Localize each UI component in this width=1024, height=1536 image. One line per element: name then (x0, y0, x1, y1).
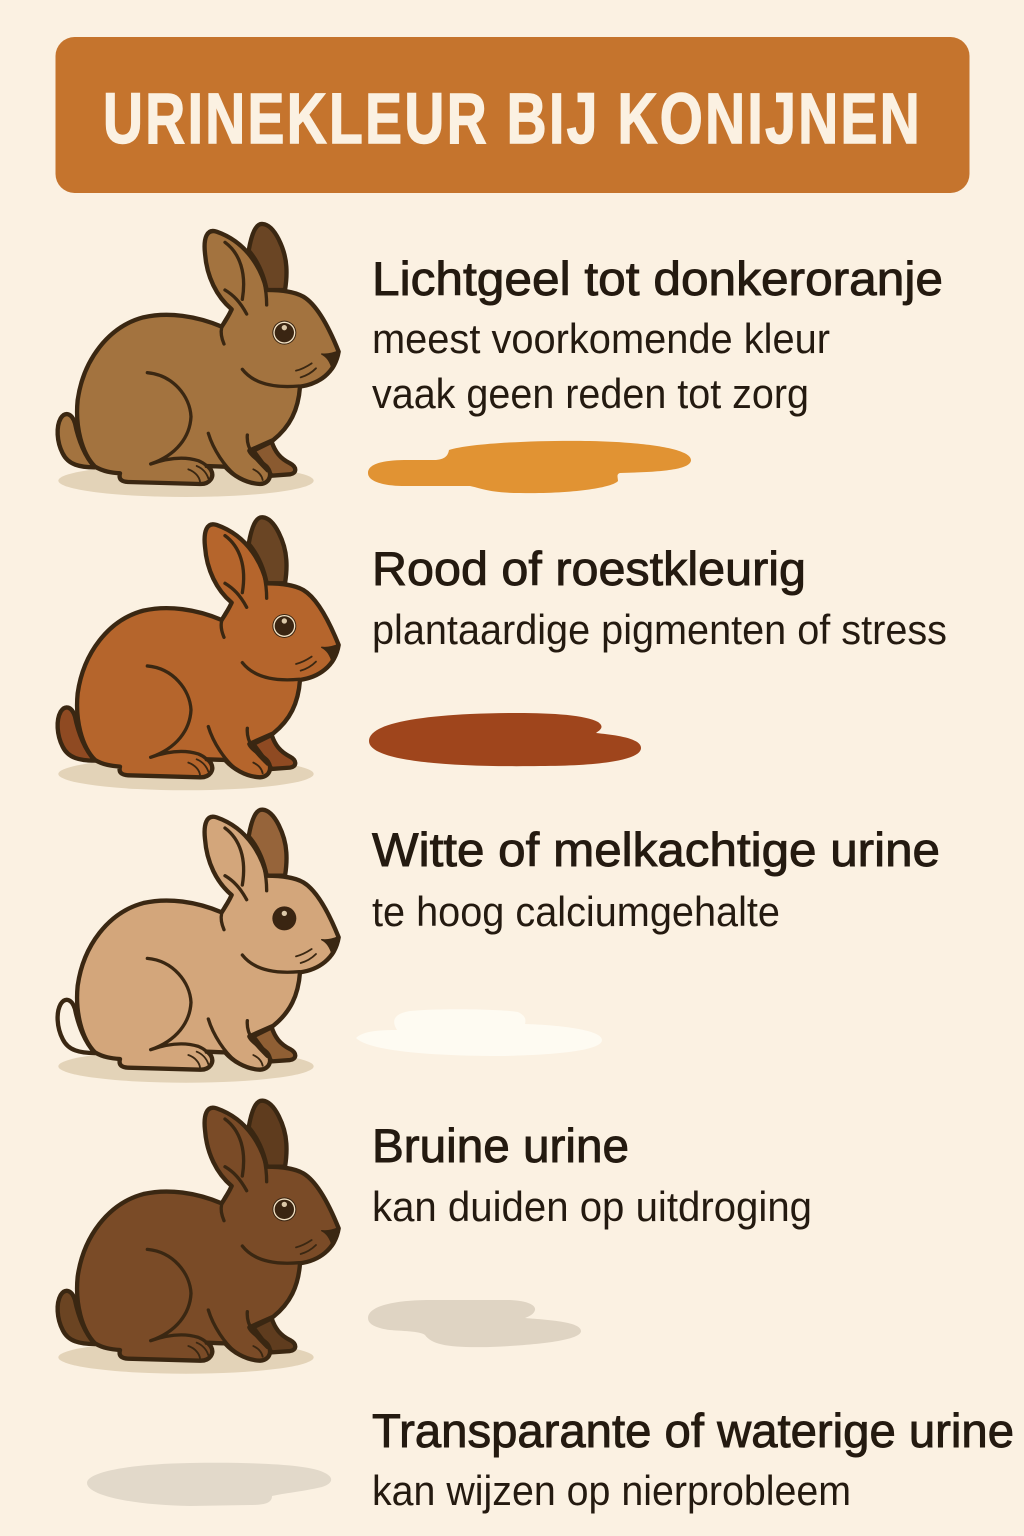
description line 2: vaak geen reden tot zorg (372, 370, 809, 417)
row 2: text (372, 542, 947, 653)
description line 1: meest voorkomende kleur (372, 315, 830, 362)
puddle: red-brown (369, 713, 641, 766)
row 4: rabbit, dark brown (58, 1101, 339, 1374)
row 3: rabbit, beige (58, 810, 339, 1083)
description: kan duiden op uitdroging (372, 1183, 812, 1230)
puddle: grey-beige (368, 1300, 581, 1347)
description: kan wijzen op nierprobleem (372, 1467, 851, 1514)
heading: bruine urine: Bruine urine (372, 1119, 629, 1172)
row 4: text (372, 1119, 812, 1230)
description: te hoog calciumgehalte (372, 888, 780, 935)
row 1: text (372, 252, 943, 417)
row 1: rabbit, light brown (58, 224, 339, 497)
puddle: orange (368, 441, 691, 493)
row 5: puddle, transparent (87, 1463, 331, 1506)
puddle: white (356, 1009, 602, 1056)
description: plantaardige pigmenten of stress (372, 606, 947, 653)
row 3: text (372, 823, 940, 935)
title banner (56, 37, 970, 193)
row 2: rabbit, rust (58, 517, 339, 790)
heading: witte of melkachtige urine: Witte of melkachtige urine (372, 823, 940, 876)
row 5: text (372, 1404, 1014, 1514)
heading: rood of roestkleurig: Rood of roestkleurig (372, 542, 806, 595)
heading: lichtgeel tot donkeroranje: Lichtgeel tot donkeroranje (372, 252, 943, 305)
heading: transparante of waterige urine: Transparante of waterige urine (372, 1404, 1014, 1457)
